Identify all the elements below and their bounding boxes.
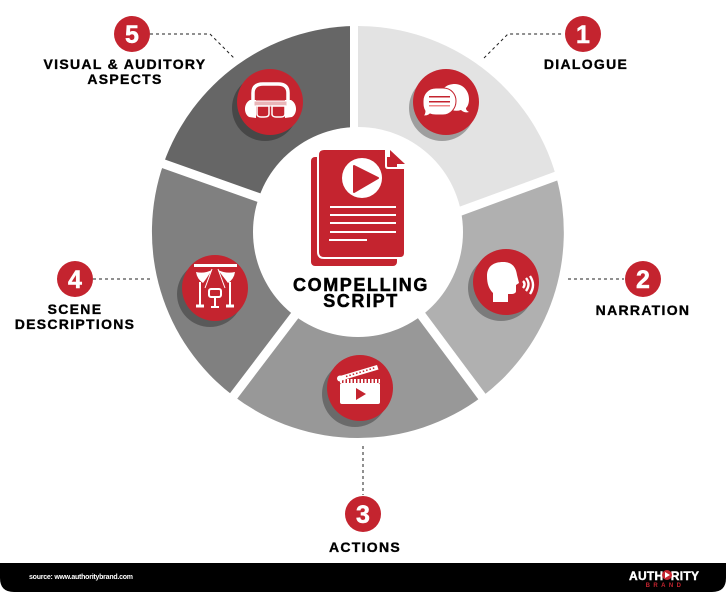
- badge 2: speaking head icon: [468, 249, 539, 321]
- center title: COMPELLING: [293, 275, 429, 295]
- badge 4: stage curtains icon: [177, 255, 248, 327]
- segment 5: visual and auditory aspects: [164, 26, 354, 198]
- label: visual and auditory aspects: ASPECTS: [87, 71, 163, 87]
- footer bar: [0, 563, 726, 592]
- label: narration: NARRATION: [596, 302, 690, 318]
- brand logo: AUTH RITY: [629, 569, 699, 583]
- label: actions: ACTIONS: [329, 539, 401, 555]
- brand logo: BRAND: [646, 583, 684, 589]
- badge 3: clapperboard icon: [322, 355, 393, 427]
- number 1: [565, 16, 601, 52]
- number 2: 2: [636, 266, 650, 294]
- leader lines: [93, 34, 624, 495]
- badge 1: speech bubbles icon: [409, 69, 479, 141]
- number 3: [345, 496, 381, 532]
- number 2: [625, 261, 661, 297]
- number 5: 5: [125, 21, 139, 49]
- number 4: 4: [68, 266, 82, 294]
- center circle: [253, 127, 463, 337]
- source text: source: www.authoritybrand.com: [29, 574, 133, 581]
- badge 5: headset and glasses icon: [232, 69, 303, 141]
- number 1: 1: [576, 21, 590, 49]
- label: scene descriptions: SCENE: [48, 301, 102, 317]
- label: dialogue: DIALOGUE: [544, 56, 628, 72]
- number 3: 3: [356, 501, 370, 529]
- segment 1: dialogue: [358, 26, 556, 215]
- segment 2: narration: [410, 176, 564, 397]
- segment 3: actions: [234, 300, 482, 438]
- segment 4: scene descriptions: [152, 164, 305, 396]
- label: scene descriptions: DESCRIPTIONS: [15, 316, 135, 332]
- center document icon: [311, 149, 405, 266]
- center title: SCRIPT: [323, 291, 399, 311]
- donut chart: [150, 20, 570, 438]
- label: visual and auditory aspects: VISUAL & AUDITORY: [44, 56, 206, 72]
- number 4: [57, 261, 93, 297]
- number 5: [114, 16, 150, 52]
